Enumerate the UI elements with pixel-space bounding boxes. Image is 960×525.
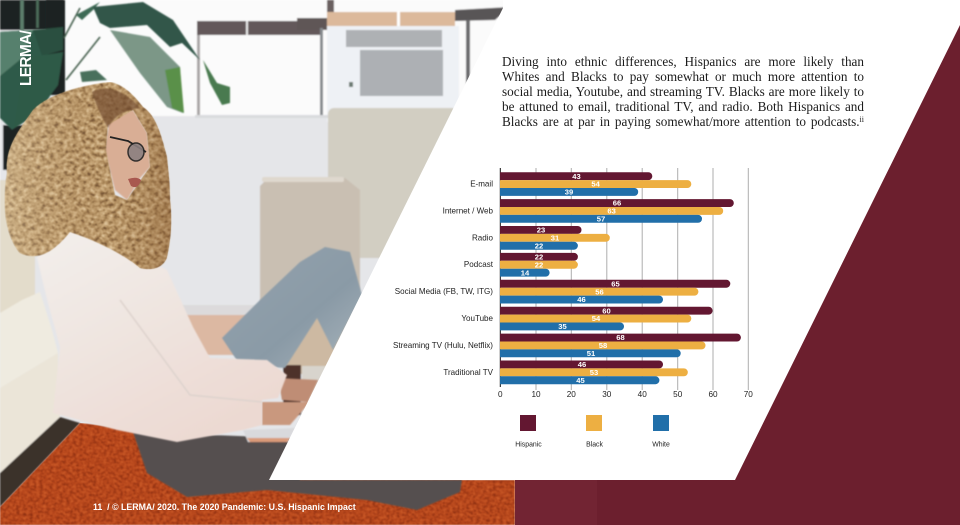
chart x-axis labels: 0 <box>498 390 503 399</box>
intro paragraph <box>502 54 864 129</box>
bars: Streaming TV: 58 <box>599 341 607 350</box>
photo: plant leaves <box>0 0 230 130</box>
legend: Black: Black <box>586 442 603 448</box>
bars: Streaming TV: 51 <box>587 349 596 358</box>
bars: Social Media <box>496 279 730 304</box>
bars: YouTube: 54 <box>592 314 601 323</box>
bars: E-mail <box>496 172 691 197</box>
chart category labels: E-mail <box>470 180 493 188</box>
bars: Social Media: 46 <box>577 295 586 304</box>
bars: Internet / Web: 57 <box>597 214 605 224</box>
bars: Radio: 22 <box>535 241 543 250</box>
chart x-axis labels: 20 <box>567 390 576 399</box>
photo: orange rug <box>0 423 515 525</box>
bars: Streaming TV: 68 <box>616 333 625 342</box>
bars: Radio: 23 <box>537 226 545 235</box>
chart category labels: Traditional TV <box>443 368 494 377</box>
bars: E-mail: 43 <box>572 172 581 181</box>
bars: Podcast <box>496 252 578 277</box>
bars: Podcast: 14 <box>521 268 530 277</box>
intro paragraph: be attuned to email, traditional TV, and radio. Both Hispanics and <box>502 99 864 114</box>
bars: Traditional TV: 53 <box>590 368 598 377</box>
logo: LERMA/: LERMA/ <box>18 31 35 86</box>
intro paragraph: Blacks are at par in paying somewhat/more attention to podcasts.ii <box>502 114 864 129</box>
chart category labels: Streaming TV (Hulu, Netflix) <box>393 341 493 350</box>
legend: Hispanic <box>515 415 542 448</box>
white area above panel <box>503 0 960 26</box>
bars: YouTube: 60 <box>602 306 611 315</box>
chart x-axis labels: 10 <box>531 390 541 399</box>
bars: Podcast: 22 <box>535 252 543 262</box>
bars: Internet / Web <box>496 199 734 224</box>
chart category labels <box>393 180 494 377</box>
bars: Radio <box>496 226 610 250</box>
legend: Hispanic: Hispanic <box>515 442 542 448</box>
chart category labels: YouTube <box>461 314 494 323</box>
chart category labels: Podcast <box>464 260 494 269</box>
intro paragraph: Whites and Blacks to pay somewhat or much more attention to <box>502 69 864 84</box>
legend <box>515 415 670 448</box>
bars: E-mail: 39 <box>565 188 573 197</box>
chart x-axis labels: 60 <box>708 390 718 399</box>
bars: Radio: 31 <box>551 234 560 242</box>
photo: room background <box>0 0 510 525</box>
bars: Traditional TV <box>496 360 688 385</box>
photo: person's face and curly hair <box>5 82 171 269</box>
intro paragraph: Diving into ethnic differences, Hispanics are more likely than <box>502 54 864 69</box>
footer text: 11 / © LERMA/ 2020. The 2020 Pandemic: U.S. Hispanic Impact <box>93 502 356 512</box>
legend: Black <box>586 415 603 448</box>
bars: Social Media: 65 <box>611 279 620 288</box>
photo: person's sweater <box>37 222 287 442</box>
bars: Social Media: 56 <box>595 287 604 296</box>
photo: sofa <box>0 180 80 507</box>
chart x-axis labels: 40 <box>638 390 647 399</box>
bars: Podcast: 22 <box>535 260 543 269</box>
chart x-axis labels <box>498 390 753 399</box>
chart category labels: Radio <box>472 233 494 242</box>
maroon corner shape <box>515 25 960 525</box>
bars: Streaming TV <box>496 333 741 358</box>
legend: White: White <box>652 442 670 448</box>
chart x-axis labels: 30 <box>602 390 612 399</box>
chart grid lines <box>536 168 748 390</box>
chart x-axis labels: 70 <box>744 390 753 399</box>
bar chart groups <box>496 172 741 385</box>
chart axis <box>499 168 501 387</box>
bars: YouTube <box>496 306 713 331</box>
photo: person's legs <box>133 247 462 510</box>
bars: Traditional TV: 45 <box>576 376 585 385</box>
legend: White <box>652 415 670 448</box>
chart x-axis labels: 50 <box>673 390 683 399</box>
chart category labels: Social Media (FB, TW, ITG) <box>395 287 493 296</box>
bars: E-mail: 54 <box>591 180 601 189</box>
bars: Internet / Web: 63 <box>607 207 616 216</box>
chart category labels: Internet / Web <box>443 206 494 215</box>
white content panel <box>269 8 960 480</box>
intro paragraph: social media, Youtube, and streaming TV. Blacks are more likely to <box>502 84 864 99</box>
bars: YouTube: 35 <box>558 322 567 331</box>
bars: Traditional TV: 46 <box>578 360 586 369</box>
bars: Internet / Web: 66 <box>613 199 621 208</box>
